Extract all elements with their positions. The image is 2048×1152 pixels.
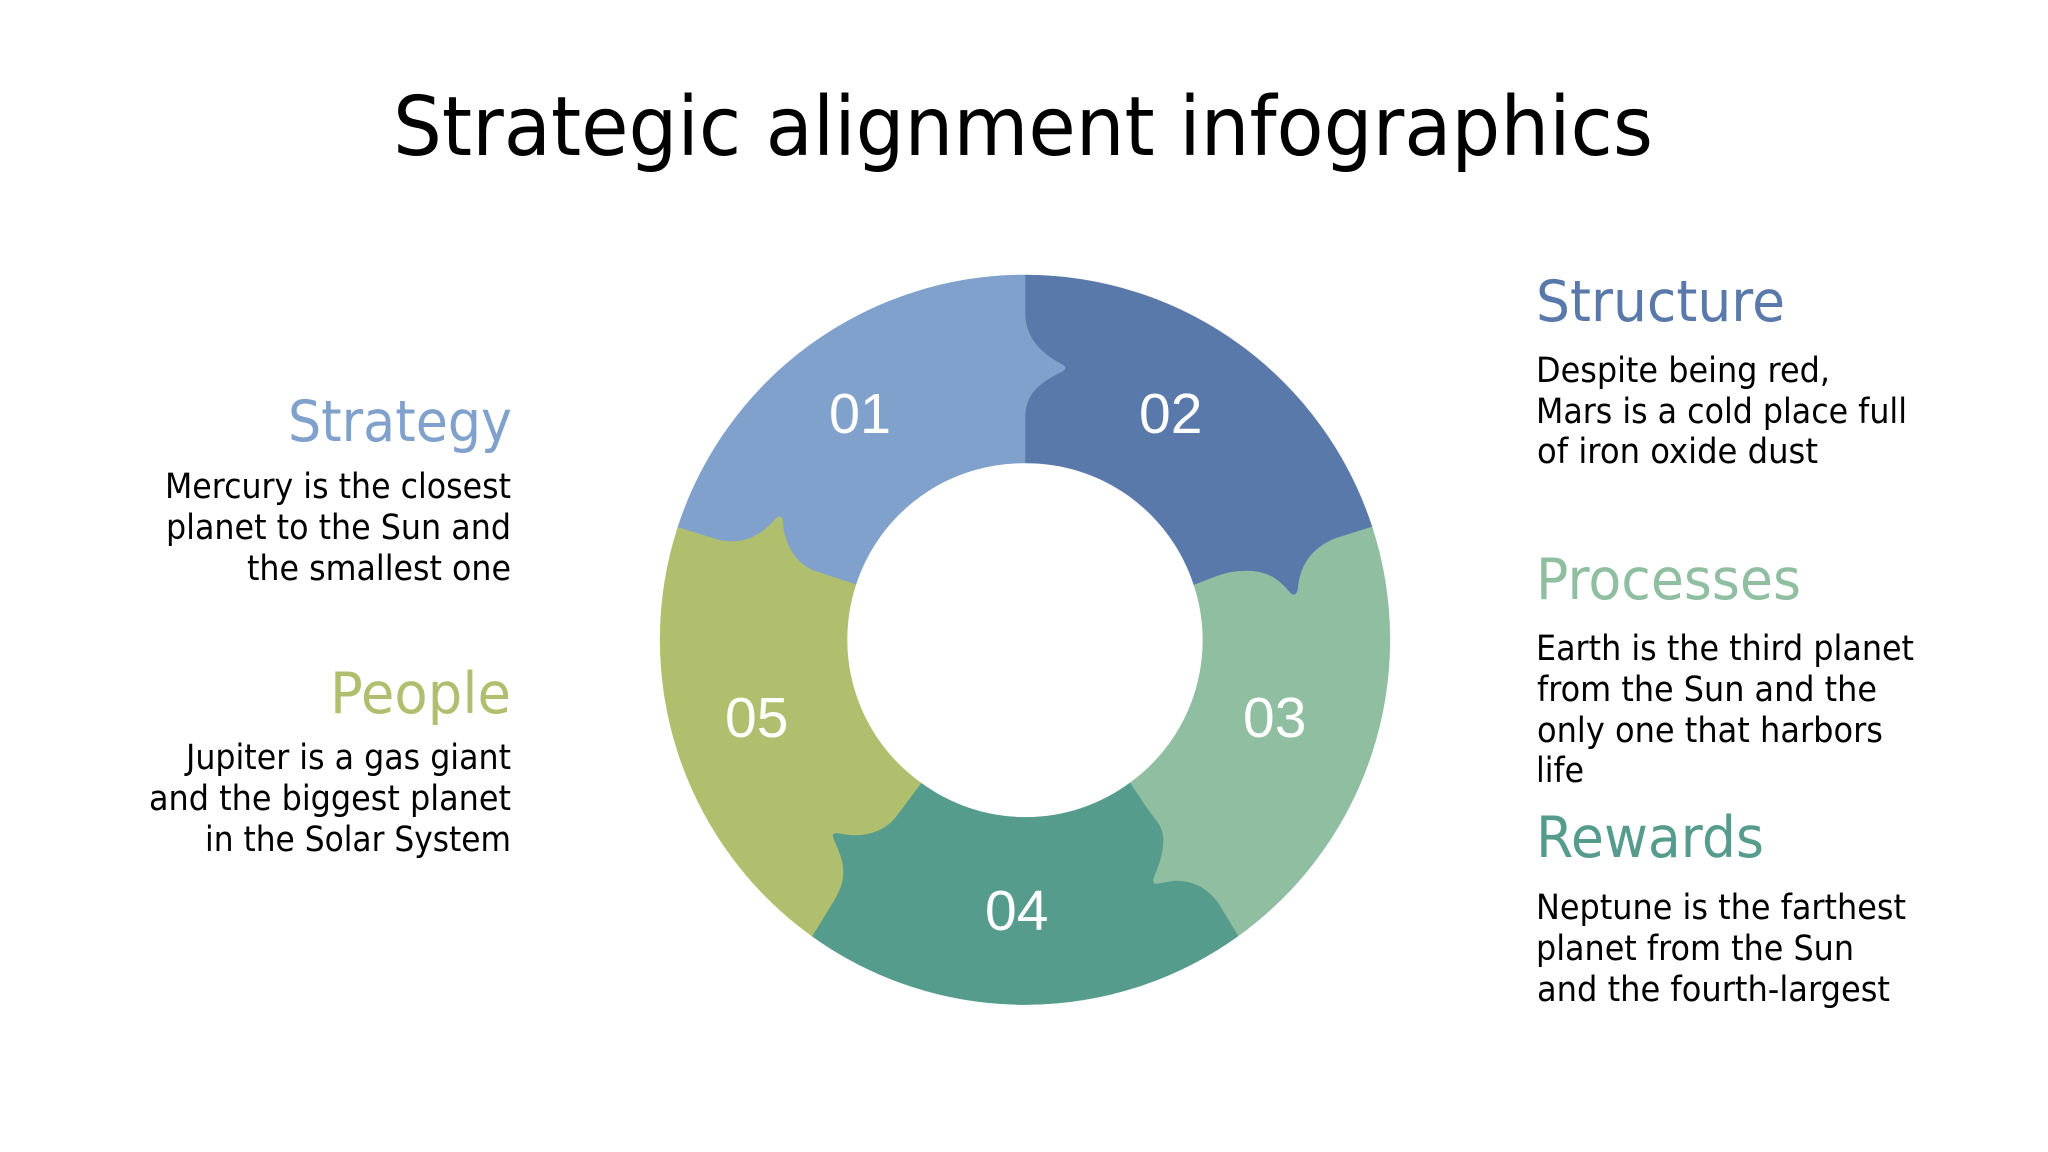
panel: structure xyxy=(1536,269,1907,472)
text: people description: in the Solar System xyxy=(205,820,511,860)
text: rewards description xyxy=(1536,888,1906,1010)
text: processes description: from the Sun and the xyxy=(1537,670,1877,710)
heading: processes: Processes xyxy=(1536,547,1801,613)
segment 01 xyxy=(678,275,1065,584)
text: rewards description: and the fourth-largest xyxy=(1537,970,1890,1010)
number 01: 01 xyxy=(829,382,891,446)
segment 04 xyxy=(812,783,1238,1005)
text: processes description: Earth is the third planet xyxy=(1536,629,1914,669)
text: processes description xyxy=(1536,629,1914,791)
heading: structure: Structure xyxy=(1536,269,1785,335)
number 05: 05 xyxy=(725,686,788,750)
donut cycle diagram xyxy=(660,275,1390,1005)
heading: rewards: Rewards xyxy=(1536,805,1764,871)
number 04: 04 xyxy=(985,879,1048,943)
text: rewards description: planet from the Sun xyxy=(1536,929,1854,969)
text: people description: Jupiter is a gas giant xyxy=(184,738,511,778)
segment 02 xyxy=(1025,275,1372,595)
heading: people: People xyxy=(330,661,511,727)
title: Strategic alignment infographics xyxy=(393,80,1653,175)
text: strategy description: Mercury is the closest xyxy=(165,467,511,507)
panel: processes xyxy=(1536,547,1914,791)
number 03: 03 xyxy=(1243,686,1306,750)
text: strategy description: the smallest one xyxy=(247,549,511,589)
heading: strategy: Strategy xyxy=(288,389,512,455)
text: people description xyxy=(149,738,511,860)
text: structure description xyxy=(1536,351,1907,472)
number 02: 02 xyxy=(1139,382,1202,446)
text: structure description: of iron oxide dust xyxy=(1537,432,1818,472)
text: structure description: Despite being red, xyxy=(1536,351,1830,391)
text: structure description: Mars is a cold place full xyxy=(1536,392,1907,432)
text: rewards description: Neptune is the farthest xyxy=(1536,888,1906,928)
segment 03 xyxy=(1130,527,1390,936)
text: processes description: only one that harbors xyxy=(1537,711,1883,751)
panel: strategy xyxy=(165,389,512,589)
panel: rewards xyxy=(1536,805,1906,1010)
panel: people xyxy=(149,661,511,860)
segment 05 xyxy=(660,516,921,936)
text: strategy description: planet to the Sun and xyxy=(166,508,511,548)
text: people description: and the biggest planet xyxy=(149,779,511,819)
text: processes description: life xyxy=(1536,751,1584,791)
text: strategy description xyxy=(165,467,511,589)
